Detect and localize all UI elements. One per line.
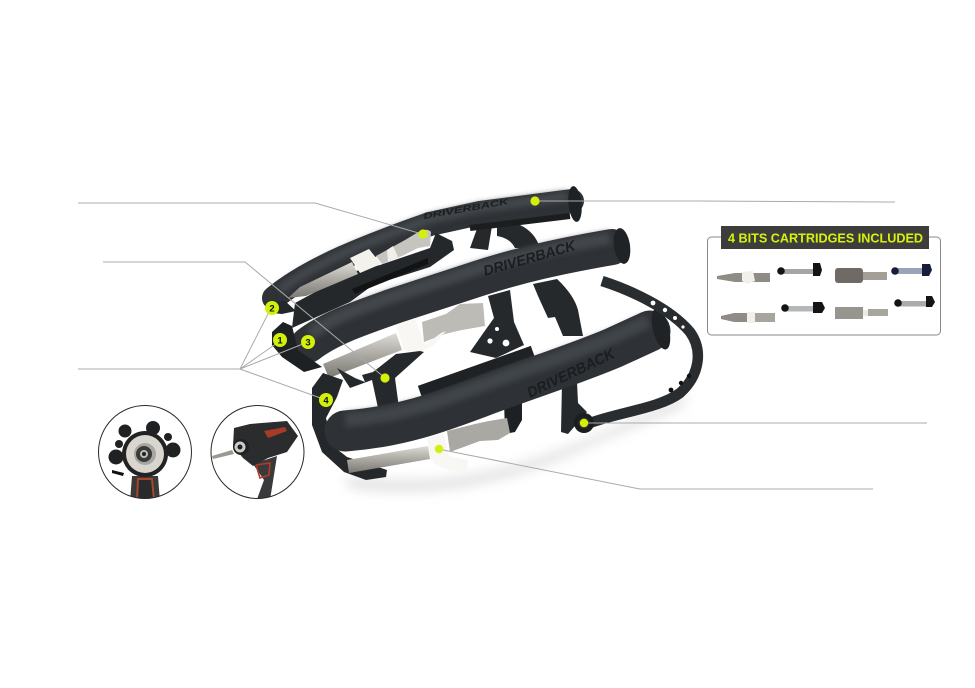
top bit	[288, 230, 431, 298]
middle rail lettering: DRIVERBACK	[482, 238, 579, 280]
panel heading: 4 BITS CARTRIDGES INCLUDED	[728, 230, 923, 246]
front frame	[312, 351, 587, 480]
middle rail end cap	[612, 227, 632, 265]
front rail lettering: DRIVERBACK	[524, 345, 618, 402]
front rail end cap	[648, 307, 674, 351]
cartridge 2	[835, 264, 932, 283]
middle bit	[323, 303, 485, 378]
middle rail	[272, 227, 632, 378]
callout markers: 3	[305, 338, 311, 348]
top rail end cap	[567, 185, 583, 223]
panel: bit cartridges	[708, 226, 940, 335]
top rail lettering: DRIVERBACK	[423, 196, 510, 221]
front bit	[347, 418, 510, 473]
strap	[574, 281, 698, 433]
cartridge 4	[835, 296, 935, 319]
cartridge 1	[717, 263, 822, 284]
callout markers: 2	[269, 304, 275, 314]
left end block	[272, 322, 322, 372]
inset: front view of drill	[98, 406, 192, 502]
rear frame arms	[470, 225, 583, 358]
product: bit holder assembly	[270, 185, 698, 480]
top holder bracket	[292, 233, 454, 328]
product shadow	[345, 392, 690, 491]
cartridge 3	[721, 302, 825, 323]
callout markers: 4	[323, 396, 329, 406]
top rail	[270, 185, 583, 328]
inset: side view of drill	[211, 406, 304, 502]
strap bolt	[574, 413, 594, 433]
panel heading	[721, 226, 929, 249]
callout markers: 1	[277, 336, 283, 346]
callout markers	[265, 196, 588, 453]
leader lines	[78, 201, 927, 489]
front rail	[345, 307, 674, 431]
